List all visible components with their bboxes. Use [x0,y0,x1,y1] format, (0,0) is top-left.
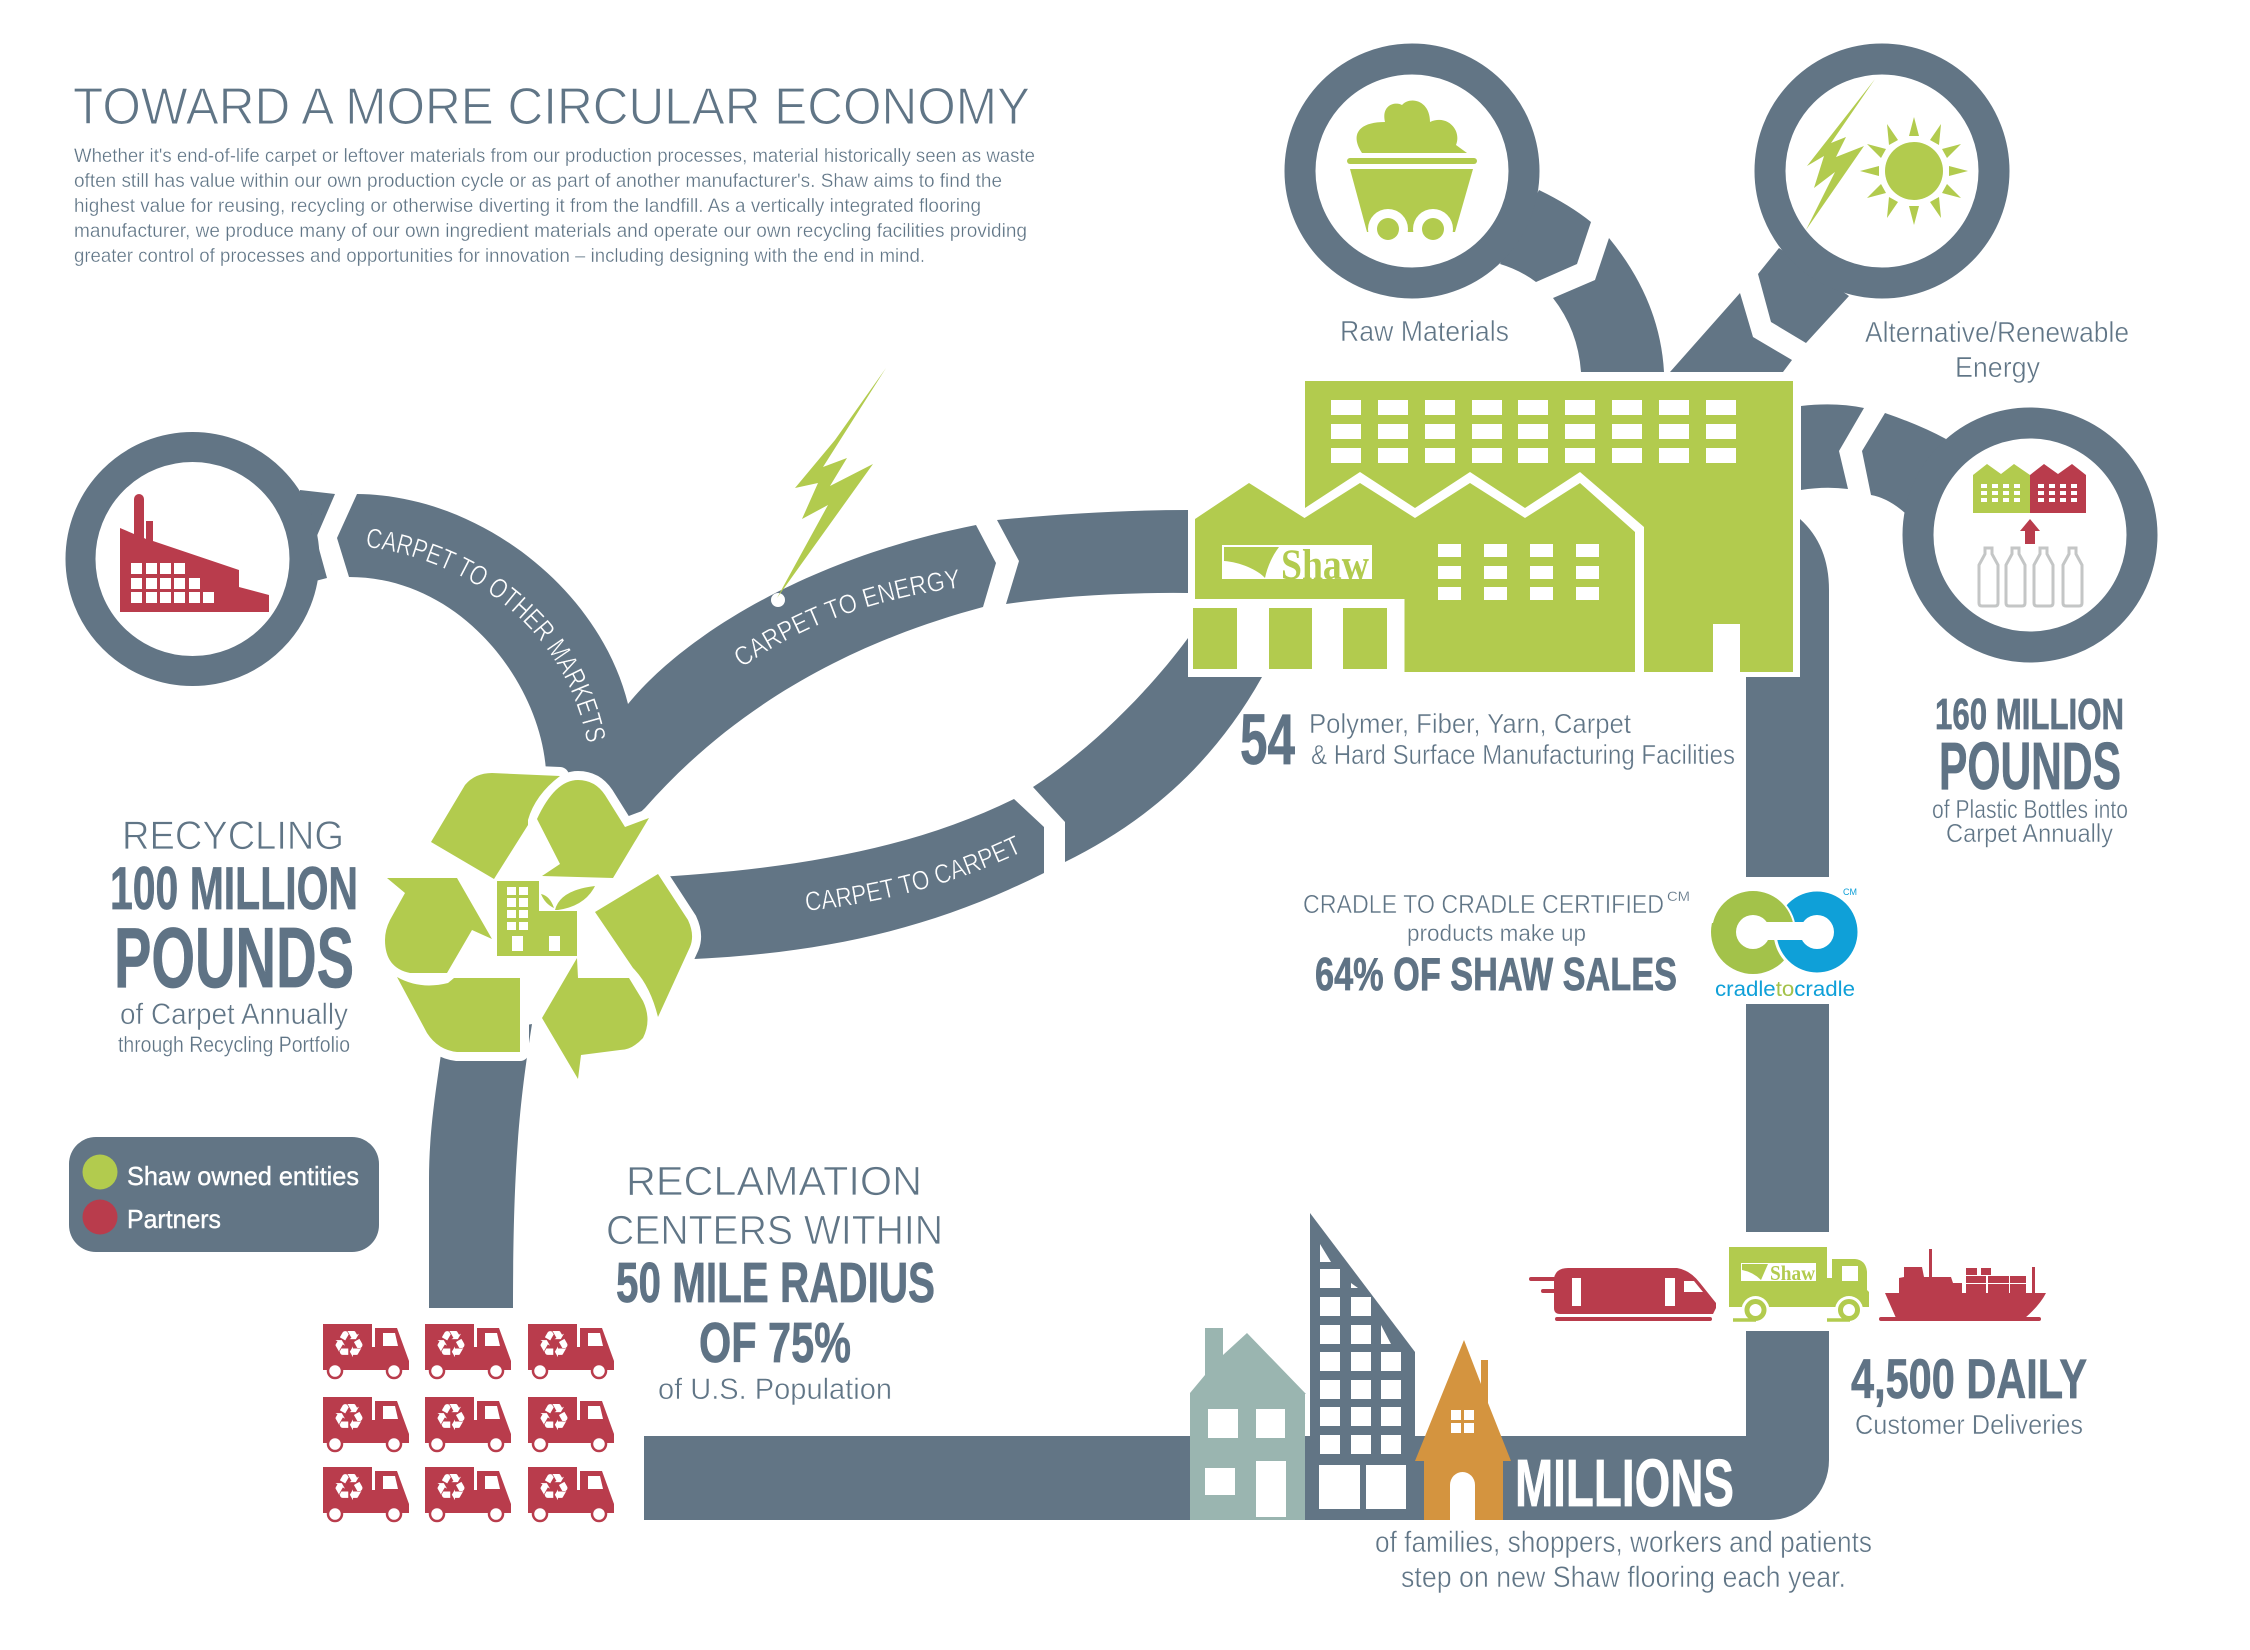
recycling arrow top right [537,780,649,878]
loading dock columns [1193,608,1387,669]
upper building [1305,381,1793,672]
stat: recycling 100 million pounds: through Recycling Portfolio [118,1032,350,1057]
intro paragraph: Whether it's end-of-life carpet or leftover materials from our production processes, material historically seen as waste [74,145,1035,167]
intro paragraph: greater control of processes and opportunities for innovation – including designing with the end in mind. [74,245,925,267]
label: alternative renewable energy: Energy [1955,352,2040,384]
icon: lightning bolt over energy ribbon [771,368,886,607]
recycling arrow right [595,874,692,1017]
title: TOWARD A MORE CIRCULAR ECONOMY [73,78,1030,136]
upper windows [1331,400,1736,463]
stat: 160 million pounds: of Plastic Bottles into [1932,794,2128,824]
icon: green Shaw truck: Shaw [1770,1261,1816,1285]
circle: raw materials [1300,59,1664,372]
stat: reclamation centers: RECLAMATION [626,1158,922,1204]
circle: other markets [80,447,335,671]
recycling arrow left [385,878,492,973]
stat: cradle to cradle: 64% OF SHAW SALES [1315,948,1677,1000]
label: carpet to carpet: CARPET TO CARPET [806,835,1018,910]
stat: 54 facilities: 54 [1240,701,1295,780]
icon: teal house [1190,1328,1306,1520]
icon grid: red recycling trucks [323,1323,614,1521]
stat: recycling 100 million pounds: 100 MILLION [110,855,358,922]
recycling arrow top left [431,773,560,879]
label: carpet to energy: CARPET TO ENERGY [735,569,958,664]
intro paragraph: often still has value within our own production cycle or as part of another manufacturer's. Shaw aims to find the [74,170,1002,192]
icon: factories from bottles [1973,464,2086,606]
icon grid: red recycling trucks: ♻ [537,1466,571,1509]
lower windows [1438,544,1599,600]
stat: cradle to cradle: CRADLE TO CRADLE CERTIFIED [1303,889,1664,919]
ribbon: carpet to other markets and carpet to energy [337,494,996,850]
Shaw logo sign: Shaw [1281,542,1369,589]
circle: renewable energy [1670,59,1994,372]
recycling symbol [385,773,692,1079]
legend: Partners [127,1204,221,1234]
icon: orange house [1415,1340,1511,1520]
label: alternative renewable energy [1865,317,2129,384]
intro paragraph [74,145,1035,267]
icon: mine cart [1347,101,1477,249]
intro paragraph: manufacturer, we produce many of our own ingredient materials and operate our own recycling facilities providing [74,220,1027,242]
icon: green Shaw truck [1729,1247,1869,1324]
icon: bolt and sun [1806,79,1968,230]
icon grid: red recycling trucks: ♻ [434,1396,468,1439]
stat: cradle to cradle: CM [1667,888,1690,904]
stat: recycling 100 million pounds [110,814,358,1057]
stat: reclamation centers: OF 75% [699,1311,851,1375]
caption: families and shoppers: of families, shoppers, workers and patients [1375,1526,1872,1559]
stat: reclamation centers: CENTERS WITHIN [606,1207,943,1253]
stat: 160 million pounds: Carpet Annually [1946,818,2113,848]
icon: cradle to cradle logo: CM [1843,887,1857,897]
icon grid: red recycling trucks: ♻ [537,1396,571,1439]
icon: cradle to cradle logo: cradletocradle [1715,978,1855,1001]
icon: red train [1531,1268,1716,1321]
icon grid: red recycling trucks: ♻ [332,1396,366,1439]
lower building [1195,483,1635,672]
stat: 54 facilities: & Hard Surface Manufacturing Facilities [1311,739,1735,770]
caption: families and shoppers [1375,1526,1872,1594]
stat: millions: MILLIONS [1515,1446,1734,1521]
label: carpet to other markets: CARPET TO OTHER MARKETS [367,528,606,742]
legend: Shaw owned entities [127,1161,359,1191]
stat: 54 facilities: Polymer, Fiber, Yarn, Carpet [1309,708,1631,739]
stat: daily deliveries: Customer Deliveries [1855,1409,2083,1440]
stat: recycling 100 million pounds: of Carpet Annually [120,998,348,1031]
ribbon: factory to customers road segments [1746,519,1829,1232]
icon: cradle to cradle logo [1711,887,1859,1001]
intro paragraph: highest value for reusing, recycling or otherwise diverting it from the landfill. As a vertically integrated flooring [74,195,981,217]
stat: 160 million pounds: 160 MILLION [1935,690,2124,739]
recycling arrow bottom left [397,977,520,1052]
white halo [385,773,692,1079]
stat: daily deliveries [1851,1347,2087,1440]
caption: families and shoppers: step on new Shaw flooring each year. [1401,1561,1846,1594]
circle: recycled bottles [1801,404,2142,647]
icon: red cargo ship [1879,1249,2046,1321]
icon grid: red recycling trucks: ♻ [537,1323,571,1366]
stat: daily deliveries: 4,500 DAILY [1851,1347,2087,1410]
stat: cradle to cradle [1303,888,1690,1000]
ribbon: reclamation path up to recycling [429,1024,532,1308]
icon: tower building [1310,1213,1415,1520]
Shaw logo sign [1222,542,1372,589]
legend [69,1137,379,1252]
label: raw materials: Raw Materials [1340,316,1509,348]
icon grid: red recycling trucks: ♻ [434,1323,468,1366]
stat: 160 million pounds: POUNDS [1939,729,2121,804]
icon grid: red recycling trucks: ♻ [434,1466,468,1509]
factory: Shaw manufacturing building [1188,372,1800,677]
stat: 160 million pounds [1932,690,2128,848]
ribbon: carpet to carpet [640,799,1044,960]
stat: recycling 100 million pounds: RECYCLING [122,814,344,858]
stat: recycling 100 million pounds: POUNDS [114,911,354,1006]
recycling arrow bottom right [542,958,648,1079]
stat: cradle to cradle: products make up [1407,920,1586,946]
stat: 54 facilities [1240,701,1735,780]
icon grid: red recycling trucks: ♻ [332,1466,366,1509]
stat: reclamation centers: of U.S. Population [658,1373,892,1406]
stat: reclamation centers [606,1158,943,1406]
ribbon: carpet to carpet connector to factory [1033,638,1262,862]
ribbon: energy to factory connector [997,510,1188,604]
icon grid: red recycling trucks: ♻ [332,1323,366,1366]
center green building with leaf [497,881,595,956]
icon: red factory [120,494,269,612]
ribbon: delivery road [644,1331,1829,1520]
stat: reclamation centers: 50 MILE RADIUS [616,1251,935,1315]
label: alternative renewable energy: Alternative/Renewable [1865,317,2129,349]
